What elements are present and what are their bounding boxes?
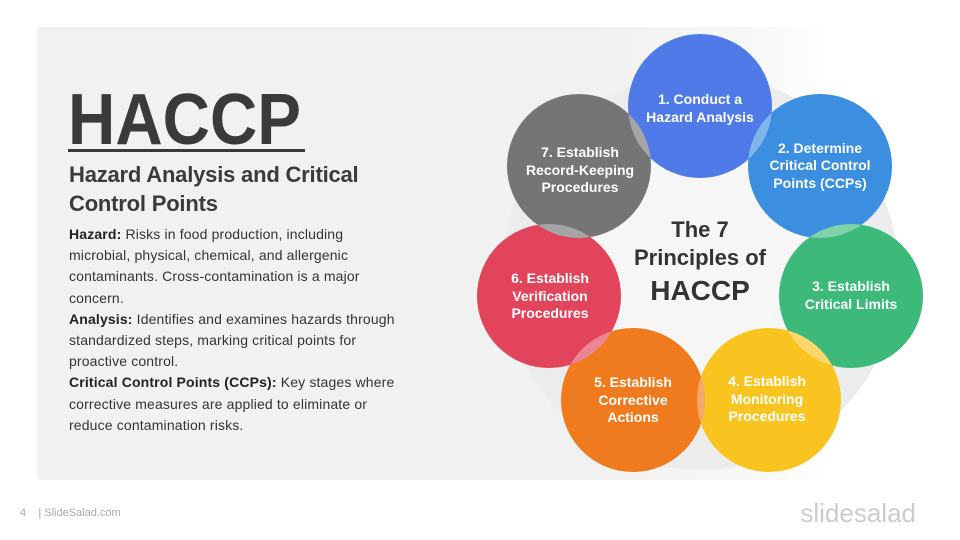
- circle 5: [561, 328, 705, 472]
- body text: [69, 226, 395, 433]
- body text: corrective measures are applied to eliminate or: [69, 396, 367, 412]
- circle 4: Monitoring: [731, 391, 803, 407]
- circle 5: Actions: [607, 409, 659, 425]
- circle 3: [779, 224, 923, 368]
- center title: Principles of: [634, 245, 767, 270]
- body text: Critical Control Points (CCPs): Key stages where: [69, 374, 394, 390]
- circle 4: [697, 328, 841, 472]
- center title: The 7: [671, 217, 729, 242]
- circle 5: Corrective: [598, 392, 668, 408]
- circle 6: Procedures: [511, 305, 589, 321]
- circle 1: Hazard Analysis: [646, 109, 754, 125]
- circle 4: Procedures: [728, 408, 806, 424]
- body text: standardized steps, marking critical points for: [69, 332, 356, 348]
- circle 1: [628, 34, 772, 178]
- body text: reduce contamination risks.: [69, 417, 243, 433]
- body text: concern.: [69, 290, 124, 306]
- circle 2: 2. Determine: [778, 140, 862, 156]
- body text: Hazard: Risks in food production, including: [69, 226, 343, 242]
- subtitle: Hazard Analysis and Critical: [69, 162, 358, 187]
- subtitle: [69, 162, 358, 216]
- circle 4: 4. Establish: [728, 373, 806, 389]
- circle 2: Points (CCPs): [773, 175, 867, 191]
- body text: proactive control.: [69, 353, 178, 369]
- circle 2: Critical Control: [769, 157, 871, 173]
- circle 6: [477, 224, 621, 368]
- circle 3: Critical Limits: [805, 296, 897, 312]
- body text: Analysis: Identifies and examines hazards through: [69, 311, 395, 327]
- footer: 4 | SlideSalad.com: [20, 507, 121, 519]
- principles diagram: [477, 34, 923, 472]
- circle 6: Verification: [512, 288, 588, 304]
- title: HACCP: [68, 80, 301, 160]
- circle 1: 1. Conduct a: [658, 91, 742, 107]
- center title: HACCP: [650, 275, 750, 306]
- circle 2: [748, 94, 892, 238]
- circle 6: 6. Establish: [511, 270, 589, 286]
- body text: contaminants. Cross-contamination is a major: [69, 268, 360, 284]
- background panel: [37, 27, 827, 480]
- circle 3: 3. Establish: [812, 278, 890, 294]
- circle 7: [507, 94, 651, 238]
- background ring: [502, 74, 898, 470]
- subtitle: Control Points: [69, 191, 218, 216]
- logo: slidesalad: [800, 498, 916, 528]
- circle 7: Record-Keeping: [526, 162, 634, 178]
- circle 5: 5. Establish: [594, 374, 672, 390]
- body text: microbial, physical, chemical, and allergenic: [69, 247, 348, 263]
- circle 7: Procedures: [541, 179, 619, 195]
- center title: [634, 217, 767, 306]
- circle 7: 7. Establish: [541, 144, 619, 160]
- overlaps: [538, 112, 862, 424]
